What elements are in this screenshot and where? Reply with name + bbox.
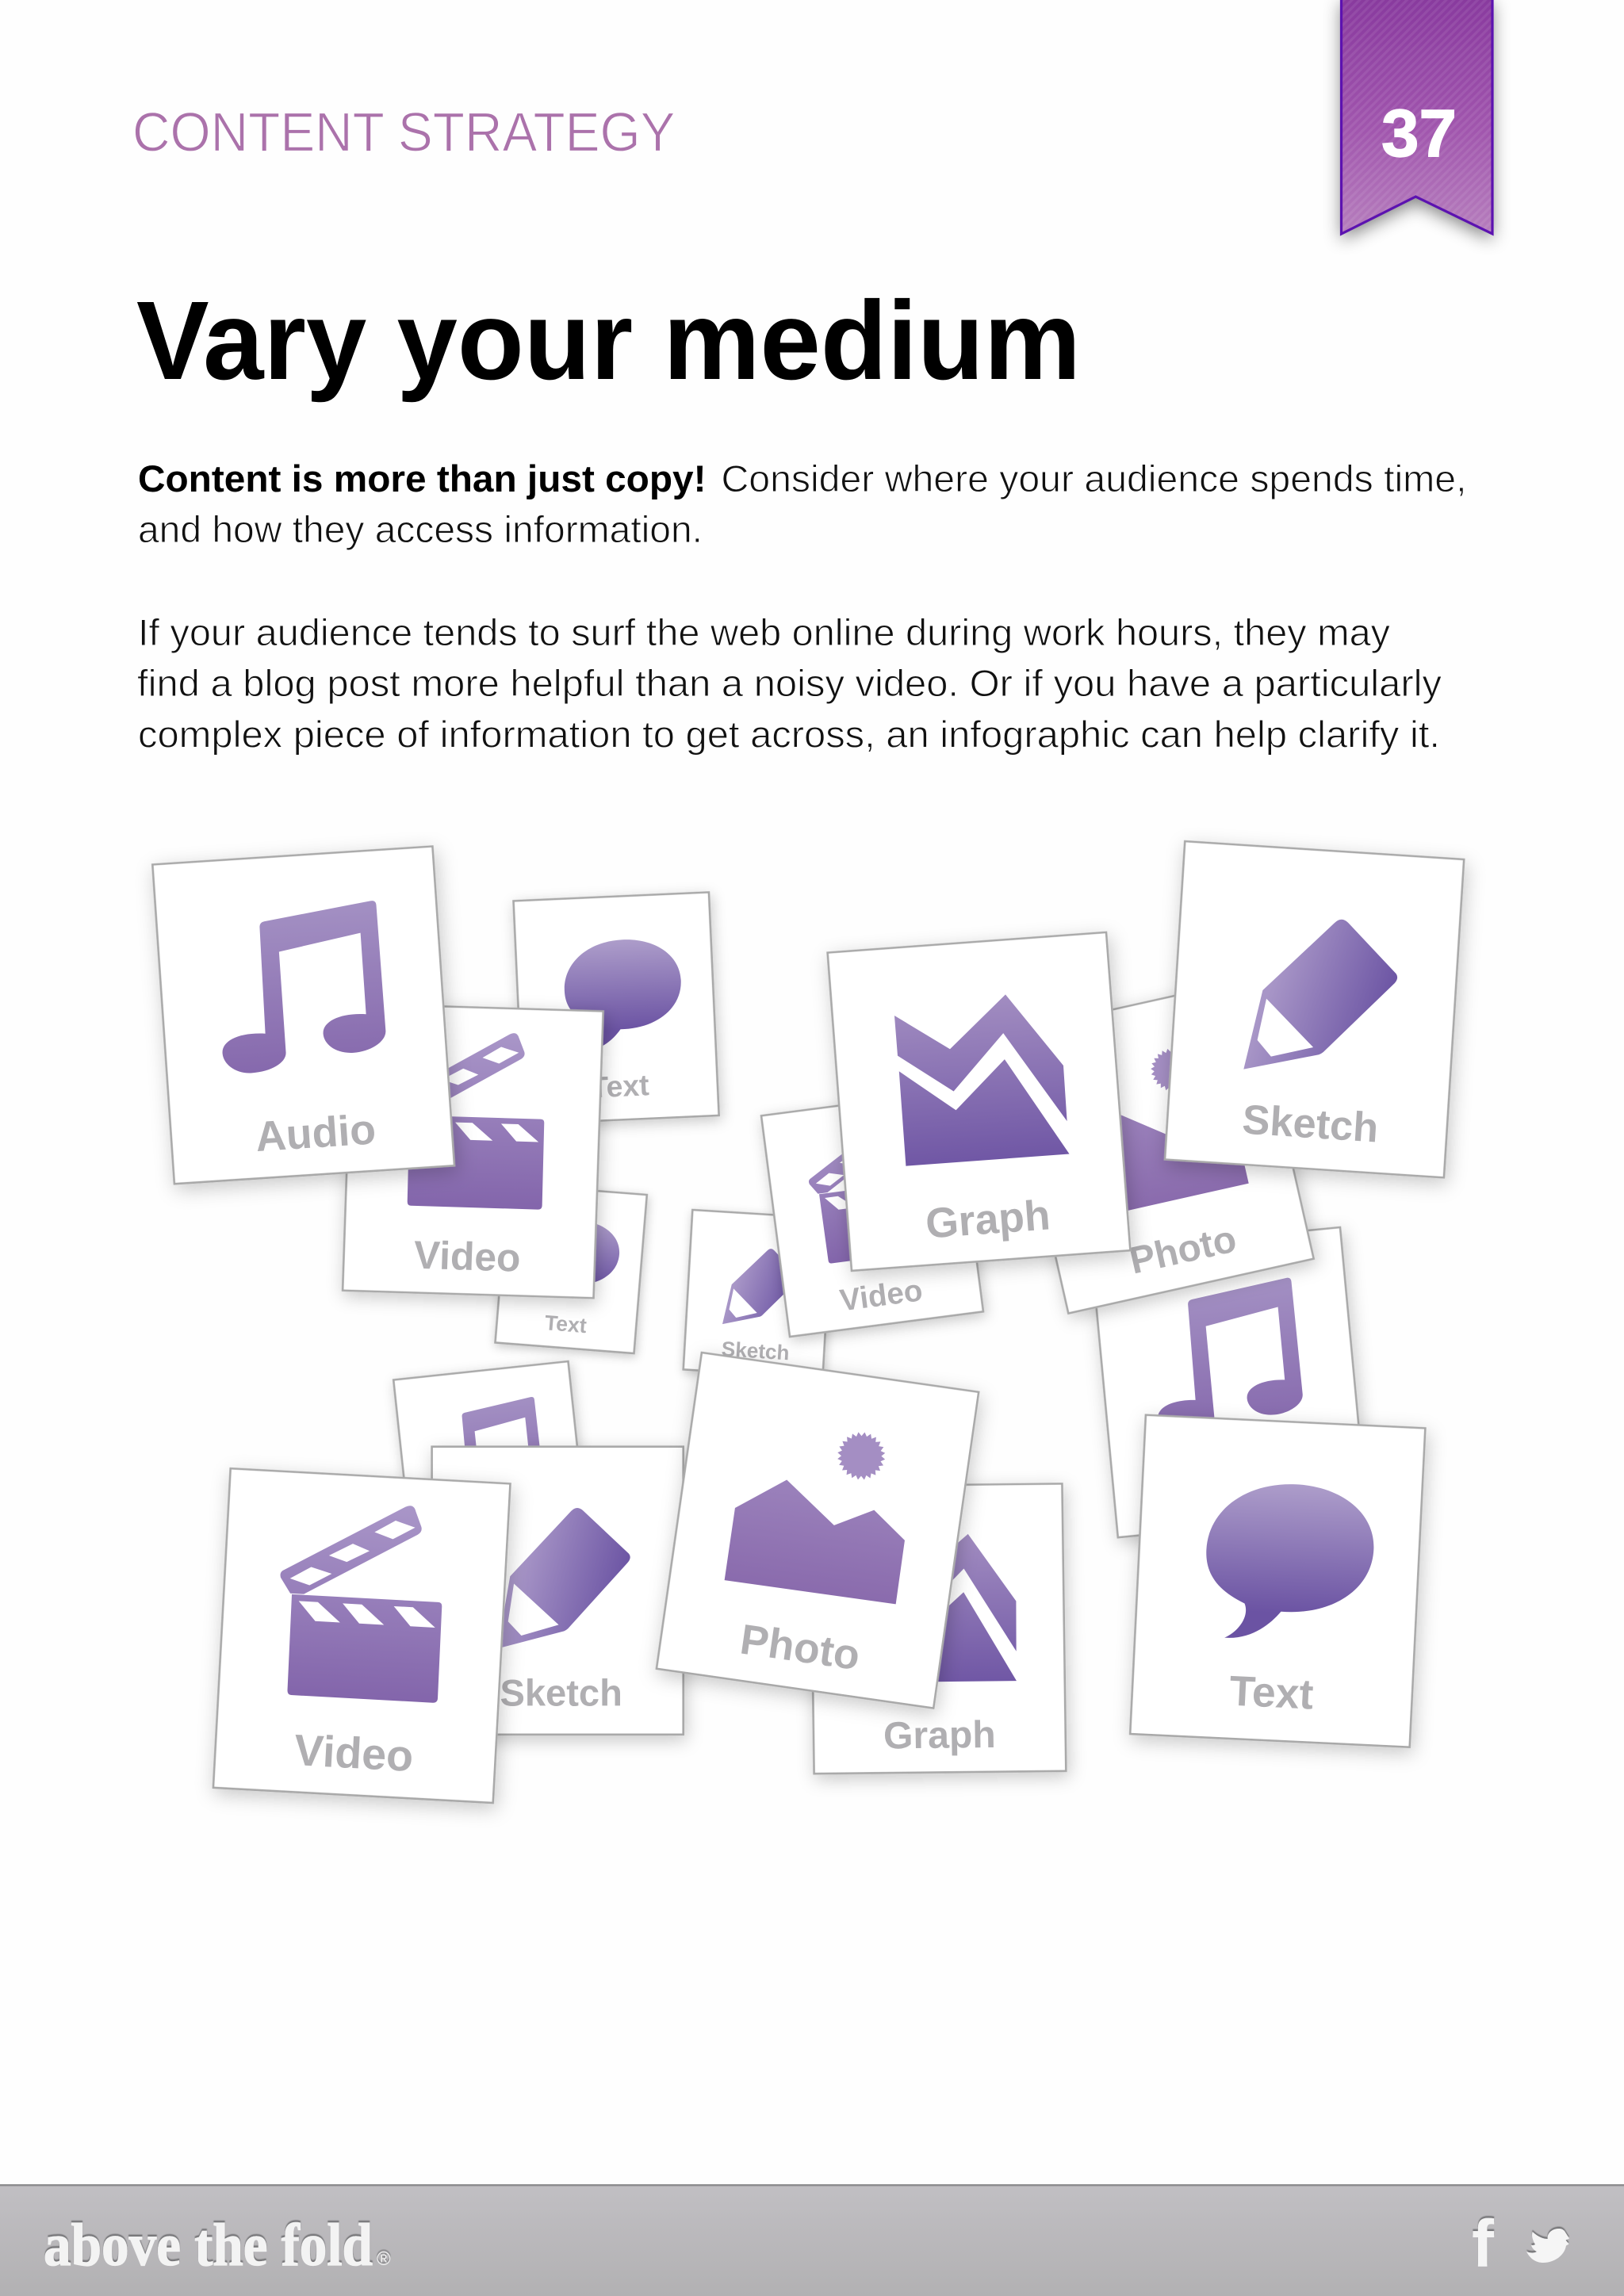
section heading: CONTENT STRATEGY [132,101,676,163]
card: text large: Text [1228,1668,1315,1719]
card: audio small [393,1361,589,1579]
intro paragraph [138,457,1467,550]
card: photo large [657,1353,979,1709]
card: video small [761,1091,983,1337]
card: photo medium: Photo [1126,1218,1240,1283]
card: text tiny: Text [544,1311,588,1337]
card: video large: Video [293,1725,415,1781]
icon: facebook: f [1472,2206,1495,2281]
card: text large [1130,1415,1425,1747]
title: Vary your medium [136,277,1081,403]
intro paragraph: and how they access information. [138,508,703,550]
card: sketch tiny [684,1210,832,1378]
footer logo: above the fold [44,2212,373,2279]
card: video medium: Video [413,1233,521,1280]
card: video medium [343,1004,603,1298]
card: sketch large [1165,841,1464,1177]
second paragraph: find a blog post more helpful than a noisy video. Or if you have a particularly [137,662,1442,704]
card: text small [514,892,719,1124]
card: audio large: Audio [254,1106,377,1161]
card: graph medium: Graph [883,1713,996,1757]
card: sketch tiny: Sketch [721,1337,790,1364]
card: audio medium: Audio [1184,1463,1294,1515]
card: audio small: Audio [462,1526,540,1563]
intro paragraph: Consider where your audience spends time, [722,457,1467,499]
card: sketch large: Sketch [1241,1097,1380,1152]
card: video small: Video [838,1273,925,1318]
card: graph large: Graph [924,1192,1051,1248]
card: graph medium [810,1483,1066,1774]
card: photo medium [1005,979,1314,1314]
second paragraph [137,611,1442,756]
card: video large [213,1468,511,1803]
footer bar [0,2184,1624,2296]
second paragraph: If your audience tends to surf the web online during work hours, they may [138,611,1391,653]
icon: twitter bird [1526,2229,1569,2263]
card: audio medium [1091,1227,1367,1537]
card: graph large [828,932,1130,1271]
card: sketch medium: Sketch [500,1671,622,1714]
second paragraph: complex piece of information to get across, an infographic can help clarify it. [138,714,1440,756]
card: text small: Text [590,1068,649,1104]
card: text tiny [495,1184,647,1353]
card: photo large: Photo [737,1616,863,1679]
page number ribbon [1342,0,1492,234]
card: sketch medium [432,1447,684,1735]
intro paragraph: Content is more than just copy! [138,457,707,499]
page number: 37 [1381,96,1457,170]
footer logo: ® [377,2248,391,2270]
card: audio large [152,847,454,1184]
